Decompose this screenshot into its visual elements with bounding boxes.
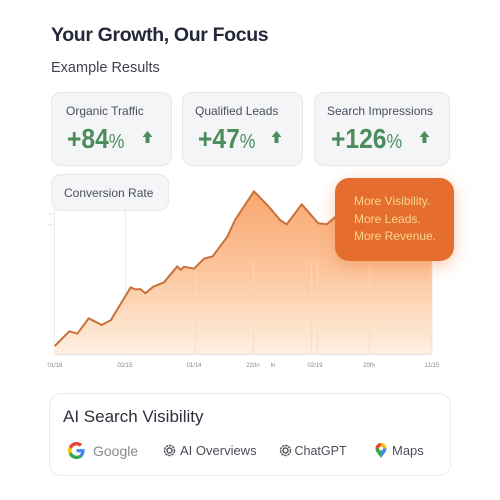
label: Maps: Maps xyxy=(392,443,424,458)
label: AI Overviews: AI Overviews xyxy=(180,443,257,458)
value: +126%: +126% xyxy=(331,123,402,154)
icon: Maps pin xyxy=(376,443,386,458)
x axis labels: 20fn xyxy=(363,363,375,369)
callout text: More Leads. xyxy=(354,212,421,226)
icon: Google logo xyxy=(68,442,85,459)
label: organic traffic: Organic Traffic xyxy=(66,104,144,118)
icon: AI Overviews xyxy=(164,444,176,456)
panel heading: AI Search Visibility xyxy=(63,407,203,426)
area fill xyxy=(55,191,432,354)
callout xyxy=(335,178,454,261)
x axis labels: 02/19 xyxy=(307,363,323,369)
label: search impressions: Search Impressions xyxy=(327,104,433,118)
label: conversion rate: Conversion Rate xyxy=(64,186,153,200)
label: Google: Google xyxy=(93,443,138,459)
icon: up arrow xyxy=(142,131,152,143)
panel: AI search visibility xyxy=(49,393,451,476)
x axis labels xyxy=(47,363,440,369)
icon: ChatGPT xyxy=(280,444,292,456)
panel: qualified leads xyxy=(182,92,303,166)
trend line xyxy=(55,191,336,346)
callout text xyxy=(354,194,436,243)
subtitle: Example Results xyxy=(51,60,160,76)
title: Your Growth, Our Focus xyxy=(51,24,268,46)
area chart xyxy=(47,190,440,369)
value: +47%: +47% xyxy=(198,123,255,154)
x axis labels: 22/In xyxy=(246,363,260,369)
x axis labels: 02/15 xyxy=(117,363,133,369)
label: qualified leads: Qualified Leads xyxy=(195,104,278,118)
callout text: More Visibility. xyxy=(354,194,430,208)
x axis labels: 01/16 xyxy=(47,363,63,369)
value: +84%: +84% xyxy=(67,123,124,154)
x axis labels: In xyxy=(270,363,276,369)
icon: up arrow xyxy=(420,131,430,143)
callout text: More Revenue. xyxy=(354,229,436,243)
panel: organic traffic xyxy=(51,92,172,166)
label: ChatGPT: ChatGPT xyxy=(294,444,347,458)
x axis labels: 11/15 xyxy=(425,363,440,369)
x axis labels: 01/14 xyxy=(186,363,202,369)
panel: conversion rate xyxy=(51,174,169,211)
icon: up arrow xyxy=(272,131,282,143)
panel: search impressions xyxy=(314,92,450,166)
